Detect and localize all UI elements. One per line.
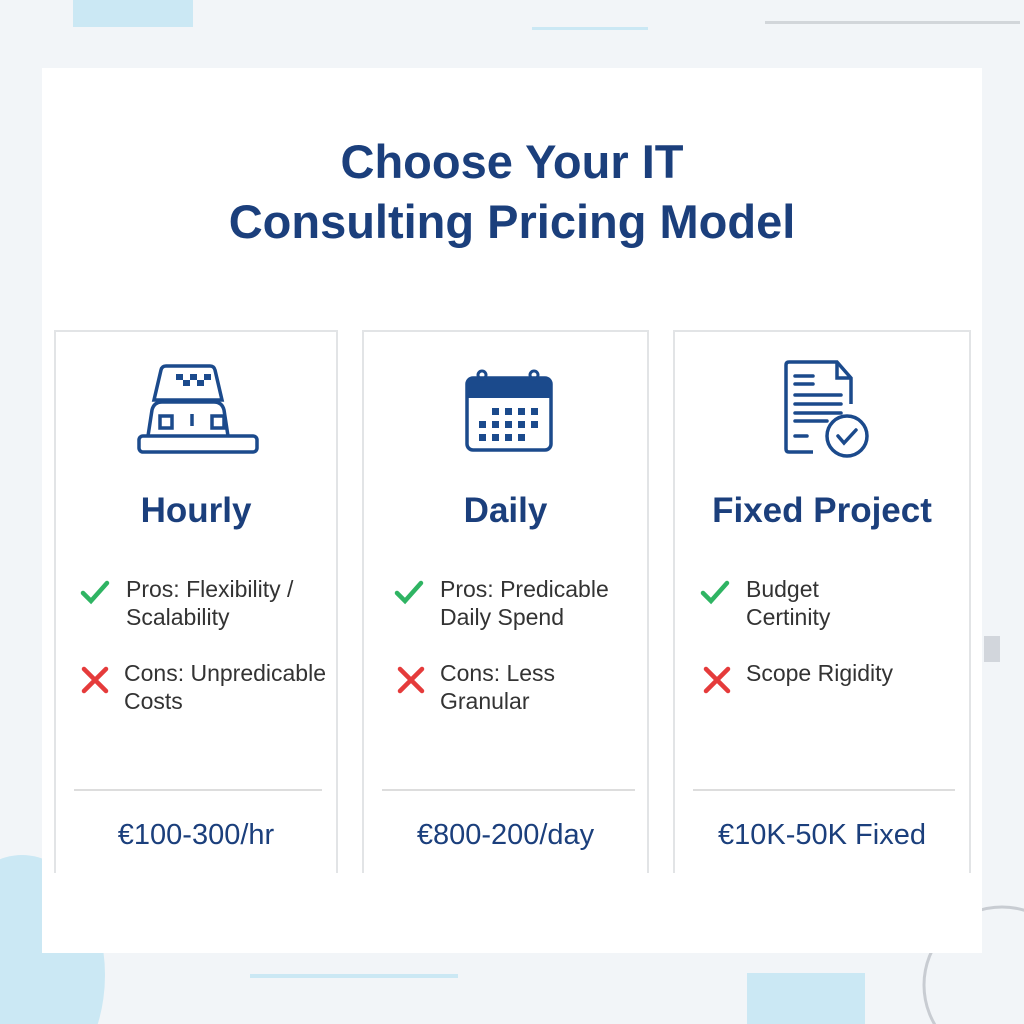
heading: Daily: [464, 491, 547, 530]
cons: [82, 660, 326, 714]
pros: Scalability: [126, 604, 230, 630]
cons: [398, 660, 555, 714]
pros: Pros: Flexibility /: [126, 576, 293, 602]
cons: Scope Rigidity: [746, 660, 893, 686]
cons: Cons: Less: [440, 660, 555, 686]
card: fixed project: [673, 330, 971, 873]
pros: Daily Spend: [440, 604, 564, 630]
card: daily: [362, 330, 649, 873]
card: hourly: [54, 330, 338, 873]
cons: Costs: [124, 688, 183, 714]
pros: Budget: [746, 576, 819, 602]
pros: [394, 576, 609, 630]
title: Consulting Pricing Model: [229, 195, 795, 248]
cons: [704, 660, 893, 694]
main panel: [42, 68, 982, 953]
price: €800-200/day: [417, 819, 594, 851]
cons: Granular: [440, 688, 529, 714]
pros: [700, 576, 830, 630]
pros: [80, 576, 294, 630]
heading: Fixed Project: [712, 491, 932, 530]
price: €100-300/hr: [118, 819, 274, 851]
icon: calendar: [465, 370, 553, 452]
price: €10K-50K Fixed: [718, 819, 926, 851]
icon: document with check: [784, 360, 869, 458]
pros: Certinity: [746, 604, 830, 630]
pros: Pros: Predicable: [440, 576, 609, 602]
cons: Cons: Unpredicable: [124, 660, 326, 686]
title: Choose Your IT: [341, 135, 683, 188]
icon: taxi: [137, 364, 259, 454]
heading: Hourly: [141, 491, 251, 530]
title: [229, 135, 795, 248]
